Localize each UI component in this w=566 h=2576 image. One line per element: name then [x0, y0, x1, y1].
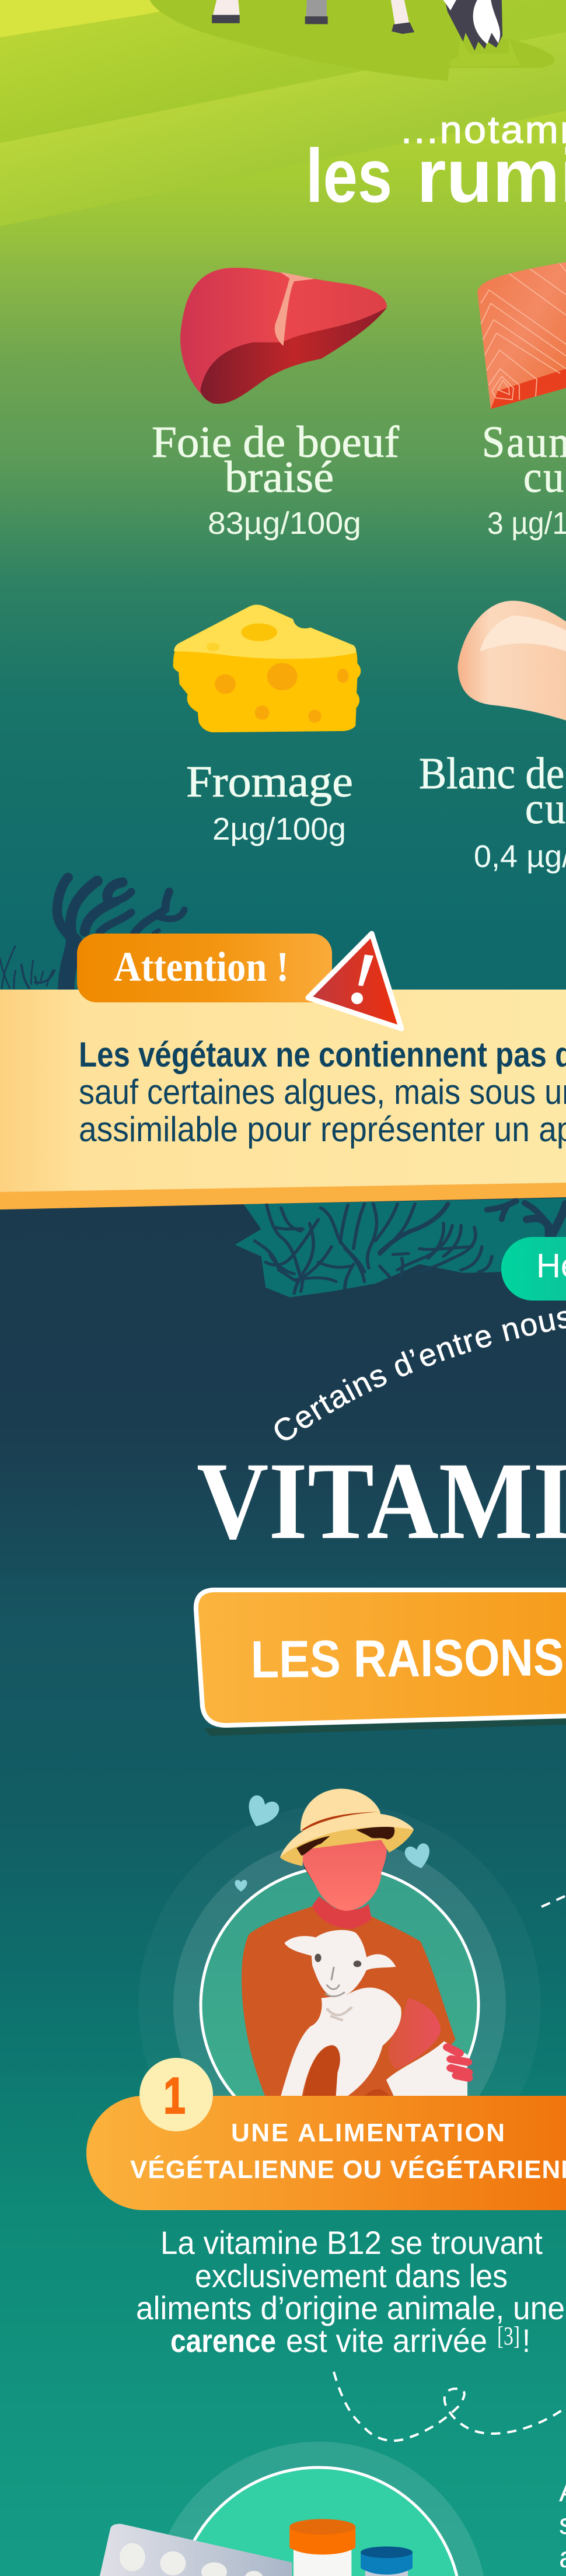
label: foie de boeuf: 83µg/100g: [208, 506, 361, 541]
box shadow: [204, 1710, 566, 1736]
lamb rear: [386, 2041, 467, 2099]
ring: [180, 2467, 457, 2576]
body text: reason 1: est vite arrivée: [286, 2322, 487, 2359]
label: fromage: 2µg/100g: [212, 812, 346, 847]
banner shadow strip: [0, 1173, 566, 1210]
icon: liver: [180, 268, 387, 404]
pill: attention: [77, 934, 332, 1002]
icon: warning triangle: [308, 934, 401, 1029]
banner text: [79, 1035, 566, 1149]
body text: reason 1: La vitamine B12 se trouvant: [160, 2224, 543, 2261]
cow leg 2: [305, 0, 328, 24]
heart medium: [403, 1842, 434, 1871]
farmer head and hat: [280, 1789, 414, 1929]
number badge: 1: [163, 2067, 186, 2124]
label: blanc de poulet: [419, 749, 566, 874]
number badge: [139, 2058, 213, 2131]
body text: reason 2 cropped at the right edge: [559, 2475, 566, 2574]
body text: reason 1: [3]: [497, 2322, 520, 2350]
pill title line 1: UNE ALIMENTATION: [231, 2119, 505, 2147]
illustration: pills and bottles: [100, 2442, 484, 2576]
hat band: [301, 1812, 379, 1830]
body text: reason 1: carence: [170, 2322, 276, 2359]
grass tuft: [445, 39, 520, 67]
illustration: farmer with lamb: [173, 1789, 506, 2096]
hair: [296, 1827, 394, 1856]
meadow hill bands: [0, 0, 566, 226]
label: fromage: [186, 757, 353, 847]
lamb body: [279, 1987, 401, 2099]
cow legs and tail cropped at the top: [150, 0, 555, 81]
orange bottle body: [294, 2548, 351, 2576]
label: foie de boeuf: [152, 418, 400, 541]
neck collar: [312, 1896, 372, 1929]
dark coral branches: [254, 1204, 492, 1294]
cow leg 1: [212, 0, 240, 23]
hat brim underside: [280, 1813, 414, 1866]
orange box: [196, 1590, 566, 1725]
pill: attention: Attention !: [114, 943, 289, 990]
face: [302, 1830, 387, 1911]
blue bottle cap: [361, 2546, 413, 2575]
icon: cheese: [173, 604, 361, 732]
dashed connector lower: [334, 2372, 566, 2441]
heart large: [242, 1793, 281, 1832]
cow shadow: [150, 0, 555, 81]
dark coral right: [487, 1201, 566, 1237]
halo middle: [173, 1839, 506, 2172]
lamb face details: [315, 1953, 361, 2021]
sweater: [242, 1906, 456, 2099]
body text: reason 1: [136, 2224, 565, 2359]
cow leg 3: [391, 0, 414, 34]
blue bottle body: [365, 2569, 408, 2576]
label: foie de boeuf: braisé: [225, 453, 334, 502]
blister pills: [120, 2543, 263, 2576]
heading: les ruminants: [306, 109, 566, 218]
pill: he oui: [501, 1237, 566, 1301]
lamb ears: [285, 1936, 316, 1956]
farmer hand: [448, 2047, 468, 2078]
farmer arm: [389, 1998, 441, 2070]
background: upper green-to-teal gradient: [0, 0, 566, 1225]
label: foie de boeuf: Foie de boeuf: [152, 418, 400, 467]
label: saumon: [482, 418, 566, 540]
ring: [201, 1867, 478, 2144]
banner panel: [0, 990, 566, 1192]
heading word les: les: [306, 134, 392, 218]
dashed connector upper: [541, 1896, 566, 1907]
background: lower navy-to-green gradient: [0, 1190, 566, 2576]
lamb head: [310, 1930, 368, 1998]
halo outer: [138, 1804, 541, 2207]
orange pill: [86, 2096, 566, 2210]
body text: reason 1: !: [522, 2322, 530, 2359]
heart small: [235, 1880, 247, 1892]
back hair: [304, 1867, 315, 1882]
heading box: les raisons: [196, 1590, 566, 1736]
orange bottle cap: [289, 2519, 355, 2554]
icon: chicken breast: [457, 601, 566, 721]
cow tail: [443, 0, 502, 51]
body text: reason 1: exclusivement dans les: [195, 2257, 508, 2294]
farmer body and lamb: [242, 1906, 468, 2099]
icon: salmon: [477, 257, 566, 409]
pill heading: reason 1: [86, 2058, 566, 2210]
hat brim top: [280, 1813, 414, 1857]
blister pack: [100, 2524, 292, 2576]
warning banner: [0, 990, 566, 1210]
seaweed below the banner: [235, 1198, 566, 1297]
halo: [153, 2442, 484, 2576]
hat crown: [301, 1789, 380, 1831]
seaweed above the banner: [0, 878, 184, 990]
label: fromage: Fromage: [186, 757, 353, 806]
sweater shade: [303, 2046, 340, 2096]
teal backdrop: [235, 1198, 566, 1297]
